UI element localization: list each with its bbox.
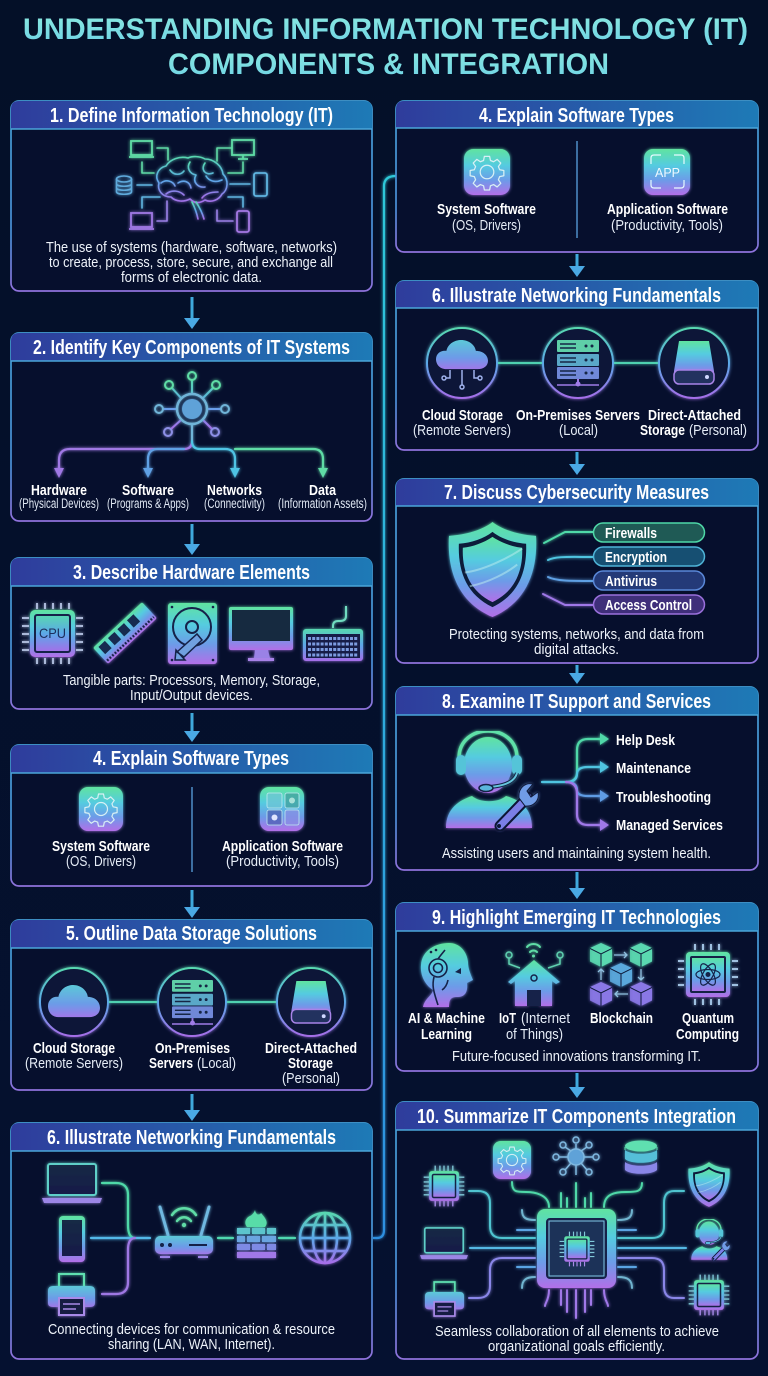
label: application software: (Productivity, Tools) [226,853,339,870]
icon: APP tile [644,149,690,195]
label: IoT: IoT [499,1010,516,1027]
label: on-premises: (Local) [559,422,598,439]
branch arrows [542,733,609,831]
icon: printer [48,1274,95,1315]
icon: hard drive [168,603,217,664]
description 6: Connecting devices for communication & resource [48,1321,335,1338]
icon: gear tile [79,787,123,831]
label: system software: System Software [437,201,536,218]
arrow [569,452,585,475]
pill: encryption [594,547,704,566]
label: quantum [676,1010,739,1043]
icon: blockchain [590,943,652,1006]
circuit lines [469,1182,686,1318]
arrow [184,1094,200,1121]
description 3 [63,672,320,704]
arrow [569,254,585,277]
panel: 10 integration [396,1102,758,1359]
label: on-premises: Servers [149,1055,193,1072]
label: application software [607,201,728,234]
labels: components: Networks [207,482,262,499]
description 9: Future-focused innovations transforming IT. [452,1048,701,1065]
icon: hub [553,1137,599,1175]
panel: 4 software (left) [11,745,372,886]
label: AI: AI & Machine [408,1010,485,1027]
pill: access control: Access Control [605,597,692,614]
description 6: sharing (LAN, WAN, Internet). [108,1336,275,1353]
label: direct-attached [640,407,747,439]
icon: app tile [260,787,304,831]
label: cloud: (Remote Servers) [25,1055,123,1072]
icon: support [691,1219,730,1260]
list: services [616,732,723,834]
label: system software: (OS, Drivers) [66,853,136,870]
icon: chip right [689,1275,729,1315]
icon: phone [59,1216,85,1262]
description 3: Input/Output devices. [130,687,253,704]
panel: 6 networking (left) [11,1123,372,1359]
label: system software [52,838,150,870]
label: direct-attached: Direct-Attached [648,407,741,424]
label: system software: (OS, Drivers) [452,217,521,234]
icon: monitor [229,607,293,661]
label: direct-attached: (Personal) [282,1070,340,1087]
description 7: digital attacks. [534,641,619,658]
pill: firewalls [594,523,704,542]
description 10: Seamless collaboration of all elements to achieve [435,1323,719,1340]
icon: shield [449,522,536,617]
labels: components: Data [309,482,337,499]
storage diagram [40,968,345,1036]
heading 4 right: 4. Explain Software Types [479,105,674,127]
description 7 [449,626,704,658]
heading 2: 2. Identify Key Components of IT Systems [33,337,350,359]
icon: CPU [22,603,83,664]
panel: 1 define IT [11,101,372,291]
label: direct-attached: Storage [288,1055,333,1072]
icon: chip [424,1166,464,1206]
arrow [569,665,585,684]
label: cloud: Cloud Storage [33,1040,115,1057]
label: direct-attached: (Personal) [689,422,747,439]
label: quantum: Computing [676,1026,739,1043]
labels: components: (Physical Devices) [19,496,99,511]
label: application software: Application Software [607,201,728,218]
icon: hub [155,372,229,436]
label: system software [437,201,536,234]
label: on-premises: On-Premises Servers [516,407,640,424]
arrow [184,890,200,918]
icon: gear tile [464,149,510,195]
icon: printer [425,1282,464,1316]
icon: support agent [446,731,538,828]
icon: keyboard [303,606,363,661]
icon: RAM [93,602,157,664]
heading 3: 3. Describe Hardware Elements [73,562,310,584]
labels: components: Software [122,482,174,499]
connector: left column to right column [373,176,396,1238]
labels: components: (Information Assets) [278,496,367,511]
title: UNDERSTANDING INFORMATION TECHNOLOGY (IT) [23,13,748,46]
heading 1: 1. Define Information Technology (IT) [50,105,333,127]
label: blockchain: Blockchain [590,1010,653,1027]
branch arrows [54,424,328,478]
storage diagram [427,328,729,398]
description 8: Assisting users and maintaining system health. [442,845,711,862]
label: application software [222,838,343,870]
label: cloud [25,1040,123,1072]
divider [576,141,578,238]
panel: 4 software (right) [396,101,758,252]
label: on-premises: (Local) [197,1055,236,1072]
description 10: organizational goals efficiently. [488,1338,665,1355]
label: on-premises: On-Premises [155,1040,230,1057]
panel: 8 support [396,687,758,870]
arrow [569,1073,585,1098]
list: services: Maintenance [616,760,691,777]
label: direct-attached: Storage [640,422,685,439]
labels: components [19,482,367,511]
panel: 7 cybersecurity [396,479,758,663]
label: AI: Learning [421,1026,472,1043]
arrow [569,872,585,899]
label: cloud [413,407,511,439]
description 7: Protecting systems, networks, and data from [449,626,704,643]
pill: antivirus: Antivirus [605,573,657,590]
label: system software: System Software [52,838,150,855]
label: direct-attached [265,1040,357,1087]
description 1: The use of systems (hardware, software, networks) [46,239,337,256]
list: services: Help Desk [616,732,676,749]
panel: 3 hardware [11,558,372,709]
description 6 [48,1321,335,1353]
icon: CPU: CPU [39,625,66,641]
panel: 9 emerging [396,903,758,1071]
heading 4: 4. Explain Software Types [93,748,289,770]
panel: 6 storage/networking (right) [396,281,758,450]
icon: router [155,1207,213,1257]
pill: firewalls: Firewalls [605,525,657,542]
labels: components: (Programs & Apps) [107,496,189,511]
central processor [537,1209,616,1288]
divider [191,787,193,872]
arrow [184,297,200,329]
icon: laptop [42,1164,102,1203]
pill connectors [543,532,593,605]
label: on-premises [149,1040,236,1072]
label: cloud: Cloud Storage [422,407,503,424]
description 10 [435,1323,719,1355]
list: services: Troubleshooting [616,789,711,806]
icon: brain network [116,140,267,232]
title: COMPONENTS & INTEGRATION [168,48,609,81]
panel: 2 key components [11,333,372,521]
labels: components: (Connectivity) [204,496,265,511]
label: IoT [499,1010,571,1043]
label: IoT: of Things) [506,1026,563,1043]
arrow [184,713,200,742]
description 3: Tangible parts: Processors, Memory, Storage, [63,672,320,689]
pill: encryption: Encryption [605,549,667,566]
icon: shield [688,1162,730,1207]
icon: APP tile: APP [655,165,680,180]
icon: globe [300,1213,350,1263]
description 1: to create, process, store, secure, and exchange all [49,254,333,271]
description 1: forms of electronic data. [121,269,262,286]
label: application software: Application Software [222,838,343,855]
panel: 5 storage [11,920,372,1090]
network lines [91,1183,295,1294]
label: application software: (Productivity, Tools) [611,217,723,234]
icon: laptop [420,1228,468,1259]
title [23,13,748,81]
label: cloud: (Remote Servers) [413,422,511,439]
icon: AI head [421,943,473,1007]
label: quantum: Quantum [682,1010,734,1027]
label: direct-attached: Direct-Attached [265,1040,357,1057]
icon: database [625,1140,657,1174]
pill: antivirus [594,571,704,590]
label: on-premises [516,407,640,439]
icon: IoT house [506,944,563,1006]
arrow [184,524,200,555]
description 1 [46,239,337,286]
heading 5: 5. Outline Data Storage Solutions [66,923,317,945]
labels: components: Hardware [31,482,87,499]
icon: firewall [237,1210,276,1258]
heading 6: 6. Illustrate Networking Fundamentals [47,1127,336,1149]
icon: quantum chip [678,944,738,1005]
label: AI [408,1010,485,1043]
icon: gear [493,1141,531,1179]
list: services: Managed Services [616,817,723,834]
label: IoT: (Internet [521,1010,571,1027]
